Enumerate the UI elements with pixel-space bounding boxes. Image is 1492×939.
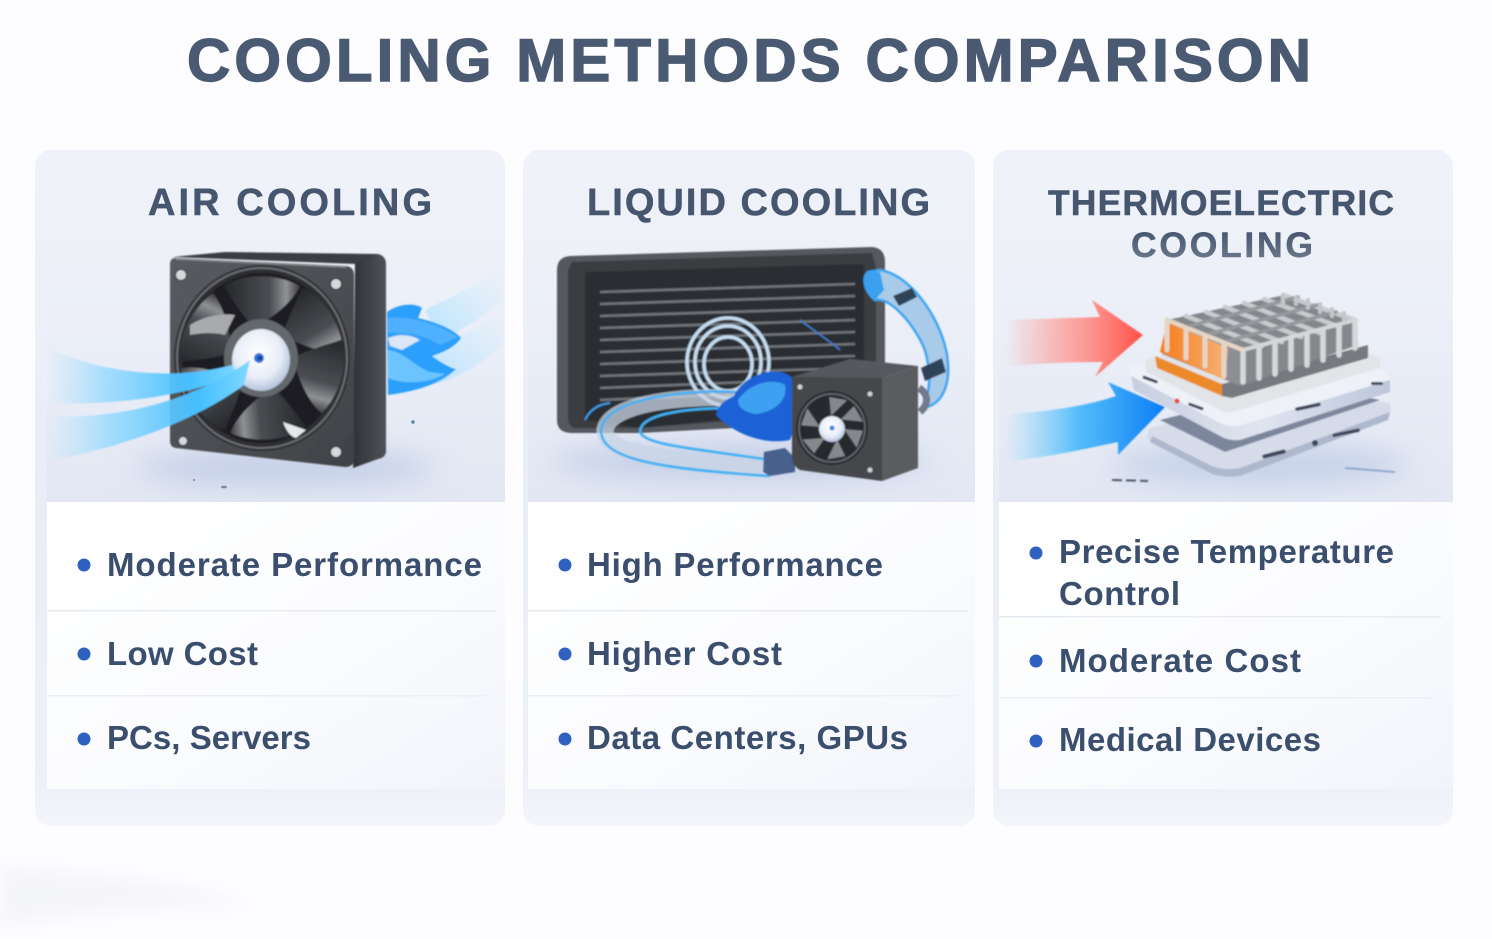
item: control: Precise Temperature [1059, 533, 1394, 570]
item: cost: Higher Cost [587, 635, 782, 672]
item: cost: Moderate Cost [1059, 642, 1301, 679]
panel: air cooling [35, 150, 505, 826]
item: uses: Medical Devices [1059, 721, 1321, 758]
item: uses: Data Centers, GPUs [587, 719, 908, 756]
icon: thermoelectric module with hot and cold arrows [1006, 236, 1424, 502]
item: uses: PCs, Servers [107, 719, 311, 756]
item: performance: High Performance [587, 546, 883, 583]
heading: thermoelectric cooling: THERMOELECTRIC [1048, 183, 1394, 223]
item: performance: Moderate Performance [107, 546, 482, 583]
heading: thermoelectric cooling: COOLING [1131, 225, 1313, 265]
panel: liquid cooling [523, 150, 975, 826]
item: cost: Low Cost [107, 635, 258, 672]
heading: liquid cooling: LIQUID COOLING [587, 182, 930, 224]
title: COOLING METHODS COMPARISON [187, 27, 1311, 94]
heading: air cooling: AIR COOLING [148, 182, 432, 224]
item: control: Control [1059, 575, 1180, 612]
list: liquid cooling [528, 502, 975, 789]
icon: AIO radiator with pump and tubes [540, 246, 950, 502]
panel: thermoelectric cooling [993, 150, 1453, 826]
list: thermoelectric cooling [999, 502, 1453, 789]
icon: case fan with airflow [47, 230, 505, 502]
list: air cooling [47, 502, 505, 789]
heading: thermoelectric cooling [1048, 183, 1394, 265]
item: control [1030, 533, 1394, 612]
